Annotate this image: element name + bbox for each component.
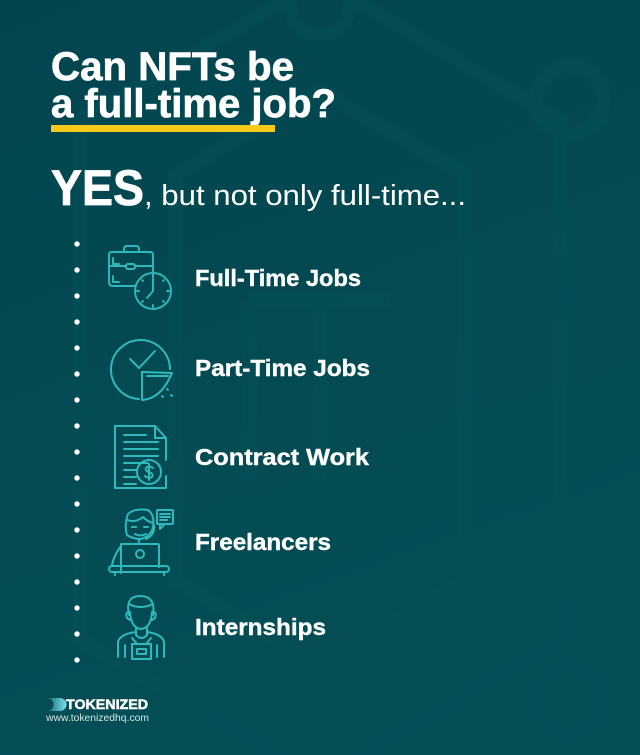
icon: document with dollar (115, 426, 166, 488)
icon: freelancer at laptop (109, 510, 173, 575)
label: Internships: Internships (195, 614, 326, 640)
title: a full-time job? (51, 82, 336, 126)
title (51, 45, 336, 126)
subtitle: , but not only full-time... (144, 180, 466, 212)
logo wordmark: TOKENIZED (66, 696, 148, 712)
icon: pie chart with check (111, 340, 172, 400)
website url: www.tokenizedhq.com (45, 712, 149, 724)
label: Freelancers: Freelancers (195, 529, 331, 555)
subtitle (51, 160, 466, 216)
icon: briefcase and clock (109, 246, 171, 309)
dotted timeline (74, 241, 80, 663)
logo (45, 696, 149, 724)
label: Full-Time Jobs: Full-Time Jobs (195, 265, 361, 291)
icon: logo mark (47, 698, 66, 711)
label: Part-Time Jobs: Part-Time Jobs (195, 355, 370, 381)
title: Can NFTs be (51, 45, 294, 89)
subtitle: YES (51, 160, 144, 216)
icon: intern with badge (118, 596, 164, 659)
title underline (51, 125, 275, 132)
label: Contract Work: Contract Work (195, 444, 369, 470)
